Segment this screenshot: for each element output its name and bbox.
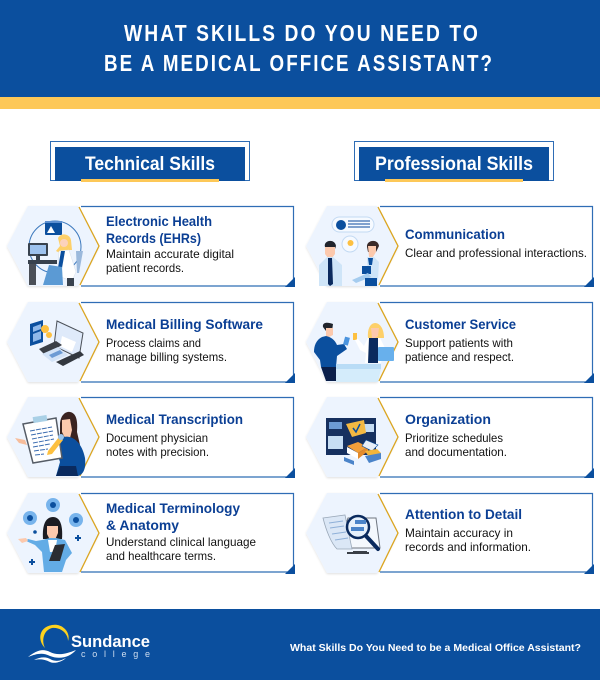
text: Communication: Clear and professional interactions. [405, 246, 587, 260]
text: Communication [405, 226, 587, 260]
header banner [0, 0, 600, 109]
icon: planning board and books [326, 418, 381, 465]
text: Medical Billing Software: manage billing systems. [106, 350, 227, 364]
text: Medical Billing Software: Medical Billing Software [106, 316, 263, 332]
text: Organization [405, 411, 507, 459]
heading: Technical Skills [50, 142, 250, 182]
text: Medical Billing Software [106, 316, 263, 364]
text: Medical Transcription: Medical Transcription [106, 411, 243, 427]
icon: reception desk [314, 323, 394, 382]
text: Customer Service: Customer Service [405, 316, 516, 332]
text: Medical Terminology and Anatomy: Medical Terminology [106, 500, 240, 516]
icon: magnifier over records [323, 515, 380, 554]
text: Electronic Health Records: Records (EHRs) [106, 230, 201, 246]
card: Communication [306, 206, 594, 287]
text: Organization: Organization [405, 411, 491, 427]
heading: Technical Skills: Technical Skills [85, 154, 215, 175]
text: Attention to Detail: Maintain accuracy in [405, 526, 513, 540]
text: Medical Terminology and Anatomy: and healthcare terms. [106, 549, 216, 563]
card: Medical Terminology and Anatomy [7, 493, 295, 574]
icon: doctor with floating symbols [18, 498, 83, 572]
icon: two colleagues talking [319, 217, 379, 286]
text: Attention to Detail: records and information. [405, 540, 531, 554]
text: Medical Transcription: Document physician [106, 431, 208, 445]
logo: Sundance College [28, 625, 150, 663]
logo: Sundance College: Sundance [71, 632, 150, 651]
heading: Professional Skills [354, 142, 554, 182]
text: Attention to Detail: Attention to Detail [405, 506, 522, 522]
text: Medical Billing Software: Process claims and [106, 336, 201, 350]
text: Medical Transcription [106, 411, 243, 459]
card: Customer Service [306, 302, 594, 383]
text: Organization: Prioritize schedules [405, 431, 503, 445]
text: Medical Transcription: notes with precision. [106, 445, 209, 459]
title: WHAT SKILLS DO YOU NEED TO [124, 20, 480, 46]
card: Medical Transcription [7, 397, 295, 478]
text: Customer Service: patience and respect. [405, 350, 514, 364]
title: BE A MEDICAL OFFICE ASSISTANT? [104, 50, 494, 76]
text: Electronic Health Records: Electronic Health [106, 213, 212, 229]
icon: billing laptop [30, 320, 84, 366]
text: Electronic Health Records [106, 213, 234, 275]
text: Organization: and documentation. [405, 445, 507, 459]
text: Communication: Communication [405, 226, 505, 242]
footer caption: What Skills Do You Need to be a Medical Office Assistant? [290, 642, 581, 654]
text: Customer Service [405, 316, 516, 364]
text: Electronic Health Records: patient records. [106, 261, 184, 275]
card: Electronic Health Records [7, 206, 295, 287]
heading: Professional Skills: Professional Skills [375, 154, 533, 175]
card: Medical Billing Software [7, 302, 295, 383]
icon: woman with clipboard [15, 412, 85, 476]
text: Medical Terminology and Anatomy: & Anatomy [106, 517, 179, 533]
text: Electronic Health Records: Maintain accurate digital [106, 247, 234, 261]
title [104, 20, 494, 76]
icon: EHR workstation [28, 221, 83, 286]
text: Customer Service: Support patients with [405, 336, 513, 350]
text: Medical Terminology and Anatomy [106, 500, 256, 563]
text: Medical Terminology and Anatomy: Understand clinical language [106, 535, 256, 549]
logo: Sundance College: college [81, 649, 150, 659]
text: Attention to Detail [405, 506, 531, 554]
card: Organization [306, 397, 594, 478]
card: Attention to Detail [306, 493, 594, 574]
footer band [0, 609, 600, 680]
